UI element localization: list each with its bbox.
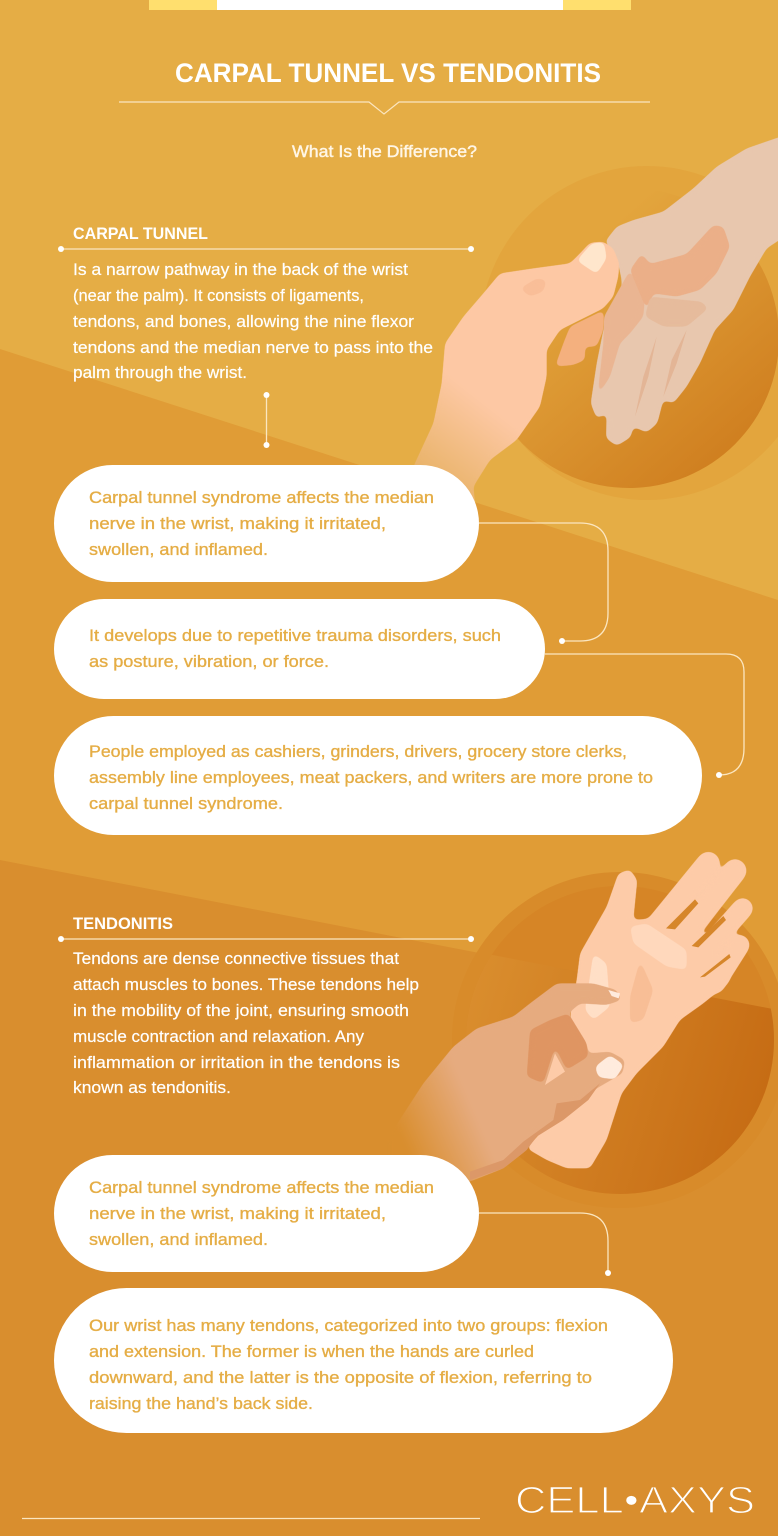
pill: median nerve: Carpal tunnel syndrome affects the median: [89, 488, 434, 507]
footer rule: [22, 1518, 480, 1520]
knuckle shading: [520, 278, 547, 297]
text block: carpal tunnel description: Is a narrow pathway in the back of the wrist: [73, 260, 408, 279]
heading rule with end dots: [58, 936, 474, 942]
finger slits: [666, 899, 731, 977]
text block: tendonitis description: attach muscles to bones. These tendons help: [73, 975, 419, 994]
text block: tendonitis description: known as tendonitis.: [73, 1078, 231, 1097]
wrist highlight: [585, 953, 610, 1020]
vertical connector: [264, 392, 270, 448]
pill: occupations: assembly line employees, meat packers, and writers are more prone to: [89, 768, 653, 787]
icon: hands: [410, 130, 778, 517]
thumb nail: [577, 242, 607, 274]
pill: repetitive trauma: [54, 599, 545, 699]
pointing hand shadow: [527, 1013, 588, 1083]
nails: [595, 1055, 624, 1079]
pale hand: [591, 130, 778, 446]
circle backdrop: [479, 166, 778, 500]
text block: carpal tunnel description: palm through the wrist.: [73, 363, 247, 382]
text block: tendonitis description: inflammation or irritation in the tendons is: [73, 1053, 400, 1072]
pill: tendonitis median nerve: swollen, and inflamed.: [89, 1230, 268, 1249]
pill: wrist tendons: [54, 1288, 673, 1433]
pill: wrist tendons: Our wrist has many tendons, categorized into two groups: flexion: [89, 1316, 608, 1335]
pill: tendonitis median nerve: nerve in the wrist, making it irritated,: [89, 1204, 386, 1223]
pill: occupations: carpal tunnel syndrome.: [89, 794, 283, 813]
open hand: [527, 863, 743, 1168]
front hand: [410, 242, 619, 517]
pill: wrist tendons: raising the hand’s back side.: [89, 1394, 313, 1413]
pill: repetitive trauma: as posture, vibration, or force.: [89, 652, 329, 671]
illustration: holding hands in circle: [410, 130, 778, 517]
subtitle: What Is the Difference?: [292, 142, 477, 161]
text block: carpal tunnel description: tendons, and bones, allowing the nine flexor: [73, 312, 414, 331]
pale hand dark palm: [630, 225, 730, 310]
section heading: tendonitis: TENDONITIS: [73, 914, 173, 933]
icon: hands: [387, 863, 743, 1182]
pill: tendonitis median nerve: Carpal tunnel syndrome affects the median: [89, 1178, 434, 1197]
fingers: [657, 863, 743, 983]
pale hand finger shading: [645, 297, 708, 327]
palm crease: [630, 960, 653, 1023]
pill: median nerve: swollen, and inflamed.: [89, 540, 268, 559]
text block: tendonitis description: in the mobility of the joint, ensuring smooth: [73, 1001, 409, 1020]
pointing hand: [387, 983, 625, 1182]
text block: tendonitis description: Tendons are dense connective tissues that: [73, 949, 399, 968]
section heading: carpal tunnel: CARPAL TUNNEL: [73, 224, 208, 243]
pill: occupations: [54, 716, 702, 835]
front hand fingers: [555, 310, 604, 367]
background: lower band: [0, 860, 778, 1536]
palm pad: [630, 923, 687, 970]
connector: pill 2 to pill 3: [545, 654, 744, 778]
connector: pill 1 to pill 2: [479, 523, 608, 644]
text block: carpal tunnel description: tendons and the median nerve to pass into the: [73, 338, 433, 357]
wrist gap: [545, 1053, 565, 1085]
connector: pill 4 to pill 5: [479, 1213, 611, 1276]
top accent bar: [149, 0, 631, 10]
background: middle band: [0, 349, 778, 1536]
logo: CELL•AXYS: [515, 1480, 755, 1522]
text block: carpal tunnel description: [73, 260, 433, 382]
palm: [527, 869, 730, 1168]
pill: median nerve: [54, 465, 479, 582]
pill: repetitive trauma: It develops due to repetitive trauma disorders, such: [89, 626, 501, 645]
pill: median nerve: nerve in the wrist, making it irritated,: [89, 514, 386, 533]
text block: tendonitis description: [73, 949, 419, 1097]
heading rule with end dots: [58, 246, 474, 252]
text block: tendonitis description: muscle contraction and relaxation. Any: [73, 1027, 364, 1046]
circle backdrop: [477, 872, 778, 1194]
pill: occupations: People employed as cashiers, grinders, drivers, grocery store clerks,: [89, 742, 627, 761]
pale hand finger separators: [635, 330, 687, 417]
illustration: wrist pulse check in circle: [387, 863, 778, 1208]
title divider with chevron: [119, 102, 650, 114]
pill: wrist tendons: and extension. The former is when the hands are curled: [89, 1342, 534, 1361]
cuff shadow: [470, 1083, 600, 1180]
title: CARPAL TUNNEL VS TENDONITIS: [175, 58, 601, 88]
pale hand lower palm: [597, 270, 645, 397]
pill: tendonitis median nerve: [54, 1155, 479, 1272]
text block: carpal tunnel description: (near the palm). It consists of ligaments,: [73, 286, 364, 305]
pill: wrist tendons: downward, and the latter is the opposite of flexion, referring to: [89, 1368, 592, 1387]
